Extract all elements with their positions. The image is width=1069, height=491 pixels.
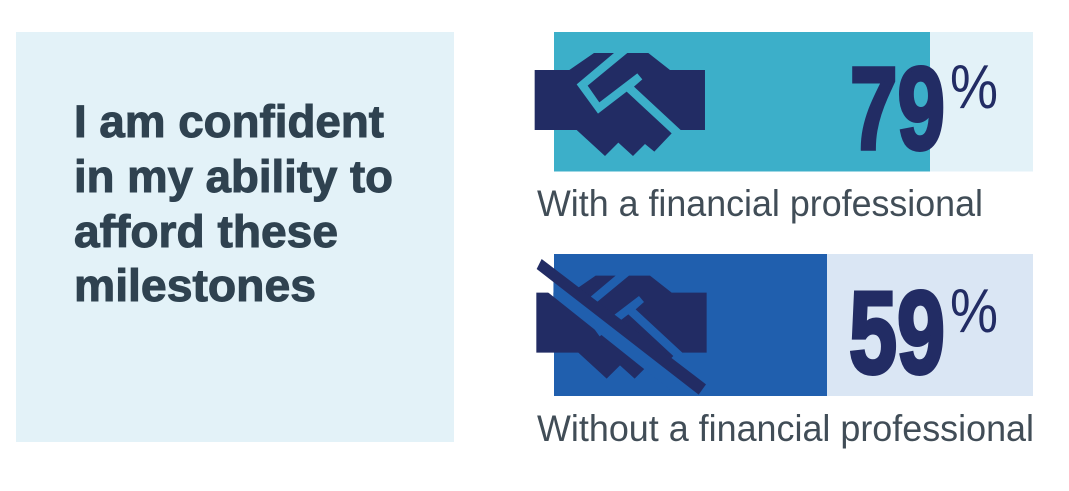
label: With a financial professional <box>537 183 983 224</box>
heading: milestones <box>74 260 316 311</box>
panel: statement <box>16 32 454 442</box>
heading <box>74 96 393 311</box>
bar track <box>554 254 1033 396</box>
panel: with a financial professional <box>535 32 1033 224</box>
icon: crossed out handshake <box>533 257 707 395</box>
panel: without a financial professional <box>533 254 1034 449</box>
value 59 percent: 59 <box>849 267 945 398</box>
icon: handshake <box>535 53 705 156</box>
bar fill 79 percent <box>554 32 930 172</box>
heading: in my ability to <box>74 151 393 202</box>
heading: I am confident <box>74 96 384 147</box>
value 79 percent: % <box>950 53 998 122</box>
bar fill 59 percent <box>554 254 827 396</box>
label: Without a financial professional <box>537 408 1034 449</box>
heading: afford these <box>74 206 338 257</box>
bar track <box>554 32 1033 172</box>
value 79 percent: 79 <box>850 43 945 174</box>
value 59 percent: % <box>950 277 998 346</box>
